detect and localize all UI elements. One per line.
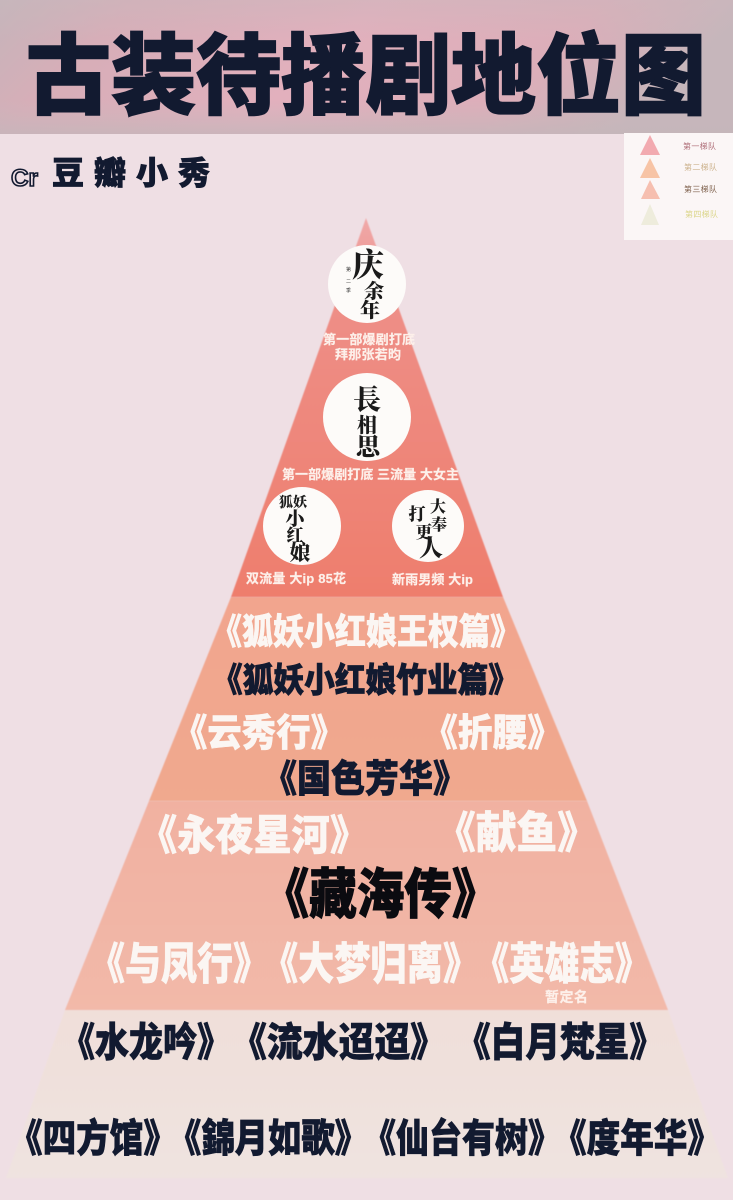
show: 庆余年 <box>323 240 415 362</box>
tier 2 band <box>149 597 587 801</box>
tier 4 entries <box>9 1021 721 1161</box>
tier 2 entries: 《云秀行》 <box>173 713 345 755</box>
tier 4 entries: 《仙台有树》 <box>363 1117 561 1161</box>
tier 2 entries: 《狐妖小红娘王权篇》 <box>211 611 521 652</box>
show: 庆余年: 庆 <box>352 240 384 286</box>
tier 3 entries: 《与凤行》 <box>89 940 269 989</box>
tier 4 entries: 《四方馆》 <box>9 1117 177 1161</box>
legend item: tier 4: 第四梯队 <box>685 209 718 219</box>
legend item: tier 2: 第二梯队 <box>684 162 717 172</box>
show: 长相思: 思 <box>356 427 383 462</box>
show: 狐妖小红娘: 娘 <box>290 537 310 567</box>
show: 庆余年: 第 <box>346 266 351 273</box>
show: 长相思: 相 <box>357 409 377 438</box>
tier 4 entries: 《白月梵星》 <box>456 1021 664 1065</box>
show: 狐妖小红娘: 红 <box>286 521 304 546</box>
show: 大奉打更人: 打 <box>408 500 426 525</box>
tier 3 band <box>65 801 668 1010</box>
tier 3 entries <box>89 809 650 1005</box>
show: 大奉打更人: 人 <box>419 528 443 563</box>
tier 3 entries: 《藏海传》 <box>262 865 500 925</box>
show: 长相思: 第一部爆剧打底 三流量 大女主 <box>282 467 459 482</box>
legend item: tier 1: 第一梯队 <box>683 141 716 151</box>
tier 2 entries: 《国色芳华》 <box>263 759 467 801</box>
title: 古装待播剧地位图 <box>26 27 706 126</box>
tier 2 entries: 《狐妖小红娘竹业篇》 <box>212 662 519 700</box>
show: 长相思 <box>282 373 459 482</box>
tier 3 entries: 暂定名 <box>545 989 588 1005</box>
show: 狐妖小红娘 <box>246 487 346 586</box>
show: 庆余年: 二 <box>346 279 351 285</box>
tier 3 entries: 《大梦归离》 <box>262 940 479 989</box>
show: 庆余年: 年 <box>360 294 380 323</box>
tier 4 entries: 《錦月如歌》 <box>168 1117 368 1161</box>
tier 4 entries: 《流水迢迢》 <box>231 1021 446 1065</box>
tier 2 entries: 《折腰》 <box>423 713 562 755</box>
show: 庆余年: 季 <box>346 287 351 294</box>
tier 4 band <box>6 1010 728 1178</box>
tier 2 entries <box>173 611 562 801</box>
show: 大奉打更人: 奉 <box>431 512 447 535</box>
tier 3 entries: 《英雄志》 <box>474 940 650 989</box>
source credit: 豆瓣小秀 <box>52 155 210 191</box>
tier 3 entries: 《献鱼》 <box>435 809 598 858</box>
show: 大奉打更人: 大 <box>430 494 446 517</box>
show: 庆余年: 拜那张若昀 <box>335 347 401 362</box>
tier 3 entries: 《永夜星河》 <box>139 812 368 859</box>
show: 狐妖小红娘: 双流量 大ip 85花 <box>246 571 346 586</box>
show: 庆余年: 第一部爆剧打底 <box>323 332 415 347</box>
show: 长相思: 長 <box>353 378 381 418</box>
header band <box>0 0 733 134</box>
show: 庆余年: 余 <box>364 275 385 304</box>
show: 大奉打更人: 新雨男频 大ip <box>392 572 473 587</box>
pyramid <box>6 218 728 1178</box>
source credit: Cr <box>11 165 38 192</box>
legend <box>624 133 733 240</box>
tier 1 entries <box>246 240 473 587</box>
show: 狐妖小红娘: 小 <box>285 504 306 531</box>
show: 狐妖小红娘: 狐妖 <box>278 492 308 512</box>
tier 4 entries: 《水龙吟》 <box>61 1021 231 1065</box>
show: 大奉打更人: 更 <box>416 518 432 543</box>
legend item: tier 3: 第三梯队 <box>684 184 717 194</box>
tier 1 band <box>231 218 503 597</box>
show: 大奉打更人 <box>392 490 473 587</box>
